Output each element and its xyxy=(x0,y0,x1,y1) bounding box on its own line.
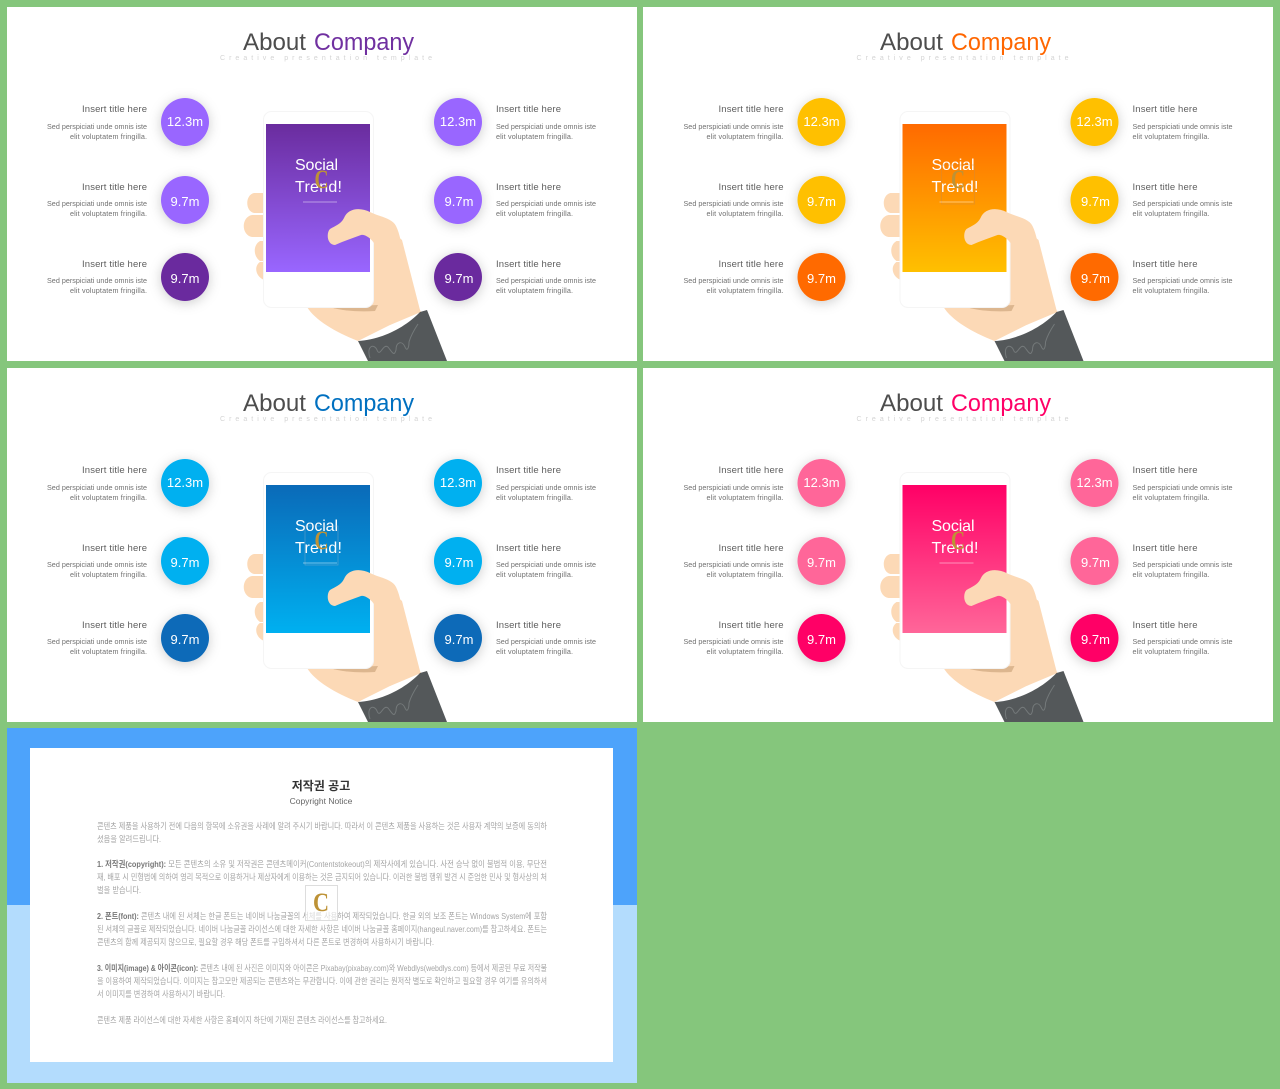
right item 2: Sed perspiciati unde omnis iste xyxy=(1132,199,1232,208)
title xyxy=(880,390,1051,417)
right item 1: Sed perspiciati unde omnis iste xyxy=(1132,122,1232,131)
section 1: copyright xyxy=(97,859,547,895)
right item 2: elit voluptatem fringilla. xyxy=(496,570,573,579)
left item 1: elit voluptatem fringilla. xyxy=(706,493,784,502)
illustration: hand holding phone: Trend! xyxy=(932,179,978,196)
right item 1: elit voluptatem fringilla. xyxy=(1132,493,1210,502)
right item 1: Insert title here xyxy=(1132,104,1198,115)
right item 2: elit voluptatem fringilla. xyxy=(1132,209,1210,218)
closing note: 콘텐츠 제품 라이선스에 대한 자세한 사항은 홈페이지 하단에 기재된 콘텐츠 라이선스를 참고하세요. xyxy=(97,1015,387,1025)
right item 2 xyxy=(434,537,596,585)
right item 1: 12.3m xyxy=(440,475,476,490)
left item 1: elit voluptatem fringilla. xyxy=(70,132,147,141)
section 3: image and icon: 을 이용하여 제작되었습니다. 이미지는 참고모만 제공되는 콘텐츠와는 무관합니다. 이에 관한 권리는 원저작 별도로 확인하고 필요할 경우 여기를 유의하셔 xyxy=(97,976,547,986)
right item 1: 12.3m xyxy=(440,114,476,129)
left item 1 xyxy=(684,459,846,507)
right item 2: 9.7m xyxy=(445,194,473,209)
left item 3: Insert title here xyxy=(82,259,147,270)
left item 3 xyxy=(684,253,846,301)
left item 1: 12.3m xyxy=(803,114,840,129)
left item 2 xyxy=(684,537,846,585)
left item 2: Sed perspiciati unde omnis iste xyxy=(684,199,784,208)
illustration: hand holding phone: Trend! xyxy=(295,179,342,196)
panel: pink slide xyxy=(643,368,1273,722)
right item 3: elit voluptatem fringilla. xyxy=(1132,286,1210,295)
left item 2: Insert title here xyxy=(718,182,784,193)
subtitle: Creative presentation template xyxy=(856,416,1069,423)
right item 3: elit voluptatem fringilla. xyxy=(496,647,573,656)
left item 1: 12.3m xyxy=(803,475,840,490)
right item 2: 9.7m xyxy=(1081,555,1110,570)
right item 1: 12.3m xyxy=(1076,475,1113,490)
section 1: copyright: 1. 저작권(copyright): 모든 콘텐츠의 소유 및 저작권은 콘텐츠메이커(Contentstokeout)의 제작사에게 있습니다. 사전 승낙 없이 불법적 이용, 무단전 xyxy=(97,859,547,869)
left item 3: Sed perspiciati unde omnis iste xyxy=(47,637,147,646)
left item 2: elit voluptatem fringilla. xyxy=(70,209,147,218)
illustration: hand holding phone xyxy=(244,112,447,361)
right item 2: Insert title here xyxy=(496,182,561,193)
right item 3: 9.7m xyxy=(445,632,473,647)
illustration: hand holding phone: Social xyxy=(295,157,338,174)
right item 1 xyxy=(434,98,596,146)
left item 2 xyxy=(47,537,209,585)
left item 3 xyxy=(47,614,209,662)
left item 3: Insert title here xyxy=(82,620,147,631)
title: Company xyxy=(314,29,414,56)
right item 2 xyxy=(1070,537,1232,585)
left item 1: Sed perspiciati unde omnis iste xyxy=(684,122,784,131)
right item 2 xyxy=(434,176,596,224)
right item 3: 9.7m xyxy=(1081,632,1110,647)
left item 1: elit voluptatem fringilla. xyxy=(70,493,147,502)
section 2: font: 된 서체의 글꼴로 제작되었습니다. 네이버 나눔글꼴 라이선스에 대한 자세한 사항은 네이버 나눔글꼴 홈페이지(hangeul.naver.com)를 참고하세요. 폰트는 xyxy=(97,924,547,934)
right item 3 xyxy=(1070,253,1232,301)
section 3: image and icon: 서 이미지를 변경하여 사용하시기 바랍니다. xyxy=(97,989,225,999)
right item 2: Insert title here xyxy=(1132,543,1198,554)
left item 2 xyxy=(47,176,209,224)
right item 3: Sed perspiciati unde omnis iste xyxy=(496,276,596,285)
left item 3 xyxy=(684,614,846,662)
left item 2: 9.7m xyxy=(171,555,199,570)
left item 3: 9.7m xyxy=(171,632,199,647)
left item 3: Sed perspiciati unde omnis iste xyxy=(684,637,784,646)
left item 3: 9.7m xyxy=(171,271,199,286)
illustration: hand holding phone: Social xyxy=(932,157,974,174)
left item 3: Sed perspiciati unde omnis iste xyxy=(47,276,147,285)
left item 2: 9.7m xyxy=(807,194,836,209)
right item 2: Insert title here xyxy=(1132,182,1198,193)
right item 1 xyxy=(434,459,596,507)
subtitle: Creative presentation template xyxy=(220,55,432,62)
section 3: image and icon: 3. 이미지(image) & 아이콘(icon): 콘텐츠 내에 된 사진은 이미지와 아이콘은 Pixabay(pixabay.com)와 Webdlys(webdlys.com) 등에서 제공된 무료 저작물 xyxy=(97,963,547,973)
intro text xyxy=(97,821,547,844)
left item 2: Sed perspiciati unde omnis iste xyxy=(47,199,147,208)
left item 1: Insert title here xyxy=(718,465,784,476)
illustration: hand holding phone: Social xyxy=(932,518,974,535)
left item 3: 9.7m xyxy=(807,271,836,286)
right item 3: elit voluptatem fringilla. xyxy=(496,286,573,295)
title xyxy=(243,29,414,56)
title: About xyxy=(243,390,306,417)
illustration: hand holding phone: C xyxy=(314,165,328,194)
title: About xyxy=(243,29,306,56)
left item 2: 9.7m xyxy=(807,555,836,570)
title xyxy=(880,29,1051,56)
right item 2 xyxy=(1070,176,1232,224)
left item 3 xyxy=(47,253,209,301)
right item 2: Sed perspiciati unde omnis iste xyxy=(496,199,596,208)
watermark xyxy=(306,886,338,920)
left item 3: elit voluptatem fringilla. xyxy=(706,647,784,656)
right item 2: elit voluptatem fringilla. xyxy=(1132,570,1210,579)
right item 3: Insert title here xyxy=(496,259,561,270)
left item 2: Insert title here xyxy=(718,543,784,554)
subtitle: Creative presentation template xyxy=(856,55,1069,62)
right item 3: Sed perspiciati unde omnis iste xyxy=(496,637,596,646)
left item 1: Insert title here xyxy=(82,465,147,476)
title: About xyxy=(880,29,943,56)
left item 1 xyxy=(684,98,846,146)
right item 1 xyxy=(1070,459,1232,507)
left item 3: Insert title here xyxy=(718,259,784,270)
left item 2: Insert title here xyxy=(82,182,147,193)
panel: copyright notice xyxy=(7,728,637,1083)
left item 1: Sed perspiciati unde omnis iste xyxy=(47,122,147,131)
right item 3: Insert title here xyxy=(1132,259,1198,270)
left item 2: 9.7m xyxy=(171,194,199,209)
right item 2: Insert title here xyxy=(496,543,561,554)
left item 1 xyxy=(47,98,209,146)
illustration: hand holding phone: Trend! xyxy=(295,540,342,557)
illustration: hand holding phone: C xyxy=(951,526,965,555)
left item 2: Insert title here xyxy=(82,543,147,554)
title: About xyxy=(880,390,943,417)
right item 1: 12.3m xyxy=(1076,114,1113,129)
title: Company xyxy=(314,390,414,417)
illustration: hand holding phone xyxy=(244,472,447,722)
title xyxy=(243,390,414,417)
left item 3: elit voluptatem fringilla. xyxy=(70,647,147,656)
left item 3: elit voluptatem fringilla. xyxy=(70,286,147,295)
right item 2: Sed perspiciati unde omnis iste xyxy=(496,560,596,569)
right item 1: Sed perspiciati unde omnis iste xyxy=(496,483,596,492)
right item 1: elit voluptatem fringilla. xyxy=(496,132,573,141)
right item 3: Insert title here xyxy=(496,620,561,631)
left item 1: Insert title here xyxy=(718,104,784,115)
section 1: copyright: 재, 배포 시 민형법에 의하여 영리 목적으로 이용하거나 제삼자에게 이용하는 것은 금지되어 있습니다. 이러한 불법 행위 발견 시 준엄한 민사 및 형사상의 처 xyxy=(97,872,547,882)
section 3: image and icon xyxy=(97,963,547,999)
right item 1: Insert title here xyxy=(496,104,561,115)
left item 2: elit voluptatem fringilla. xyxy=(70,570,147,579)
right item 1 xyxy=(1070,98,1232,146)
left item 3: Insert title here xyxy=(718,620,784,631)
right item 2: 9.7m xyxy=(445,555,473,570)
right item 3: 9.7m xyxy=(445,271,473,286)
panel: purple slide xyxy=(7,7,637,361)
panel: blue slide xyxy=(7,368,637,722)
right item 3 xyxy=(1070,614,1232,662)
illustration: hand holding phone: C xyxy=(951,165,965,194)
left item 1: elit voluptatem fringilla. xyxy=(706,132,784,141)
left item 1: Sed perspiciati unde omnis iste xyxy=(47,483,147,492)
right item 2: Sed perspiciati unde omnis iste xyxy=(1132,560,1232,569)
left item 1: Sed perspiciati unde omnis iste xyxy=(684,483,784,492)
left item 2 xyxy=(684,176,846,224)
right item 3: Insert title here xyxy=(1132,620,1198,631)
section 1: copyright: 벌을 받습니다. xyxy=(97,885,141,895)
section 2: font xyxy=(97,911,547,947)
right item 3: elit voluptatem fringilla. xyxy=(1132,647,1210,656)
right item 2: elit voluptatem fringilla. xyxy=(496,209,573,218)
title: Company xyxy=(951,390,1051,417)
left item 3: elit voluptatem fringilla. xyxy=(706,286,784,295)
right item 1: Sed perspiciati unde omnis iste xyxy=(496,122,596,131)
left item 1 xyxy=(47,459,209,507)
right item 1: elit voluptatem fringilla. xyxy=(496,493,573,502)
right item 3: 9.7m xyxy=(1081,271,1110,286)
right item 1: Sed perspiciati unde omnis iste xyxy=(1132,483,1232,492)
right item 3 xyxy=(434,614,596,662)
illustration: hand holding phone: Trend! xyxy=(932,540,978,557)
left item 2: Sed perspiciati unde omnis iste xyxy=(47,560,147,569)
left item 3: 9.7m xyxy=(807,632,836,647)
section 2: font: 콘텐츠의 함께 제공되지 않으므로, 필요할 경우 해당 폰트를 구입하셔서 다른 폰트로 변경하여 사용하시기 바랍니다. xyxy=(97,937,434,947)
right item 3: Sed perspiciati unde omnis iste xyxy=(1132,637,1232,646)
illustration: hand holding phone: C xyxy=(314,526,328,555)
heading: 저작권 공고 xyxy=(292,778,350,793)
left item 1: 12.3m xyxy=(167,114,203,129)
right item 3: Sed perspiciati unde omnis iste xyxy=(1132,276,1232,285)
right item 1: elit voluptatem fringilla. xyxy=(1132,132,1210,141)
left item 1: Insert title here xyxy=(82,104,147,115)
right item 1: Insert title here xyxy=(1132,465,1198,476)
intro text: 셨음을 알려드립니다. xyxy=(97,834,161,844)
left item 2: elit voluptatem fringilla. xyxy=(706,570,784,579)
illustration: hand holding phone: Social xyxy=(295,518,338,535)
left item 2: Sed perspiciati unde omnis iste xyxy=(684,560,784,569)
left item 2: elit voluptatem fringilla. xyxy=(706,209,784,218)
right item 2: 9.7m xyxy=(1081,194,1110,209)
subtitle: Creative presentation template xyxy=(220,416,432,423)
panel: orange slide xyxy=(643,7,1273,361)
left item 1: 12.3m xyxy=(167,475,203,490)
left item 3: Sed perspiciati unde omnis iste xyxy=(684,276,784,285)
illustration: hand holding phone xyxy=(880,472,1084,722)
watermark: C xyxy=(313,888,329,917)
illustration: hand holding phone xyxy=(880,112,1084,361)
right item 1: Insert title here xyxy=(496,465,561,476)
subheading: Copyright Notice xyxy=(290,796,353,806)
section 2: font: 2. 폰트(font): 콘텐츠 내에 된 서체는 한글 폰트는 네이버 나눔글꼴의 서체를 사용하여 제작되었습니다. 한글 외의 보조 폰트는 Windows System에 포함 xyxy=(97,911,547,921)
title: Company xyxy=(951,29,1051,56)
right item 3 xyxy=(434,253,596,301)
intro text: 콘텐츠 제품을 사용하기 전에 다음의 항목에 소유권을 사례에 알려 주시기 바랍니다. 따라서 이 콘텐츠 제품을 사용하는 것은 사용자 계약의 보증에 동의하 xyxy=(97,821,547,831)
